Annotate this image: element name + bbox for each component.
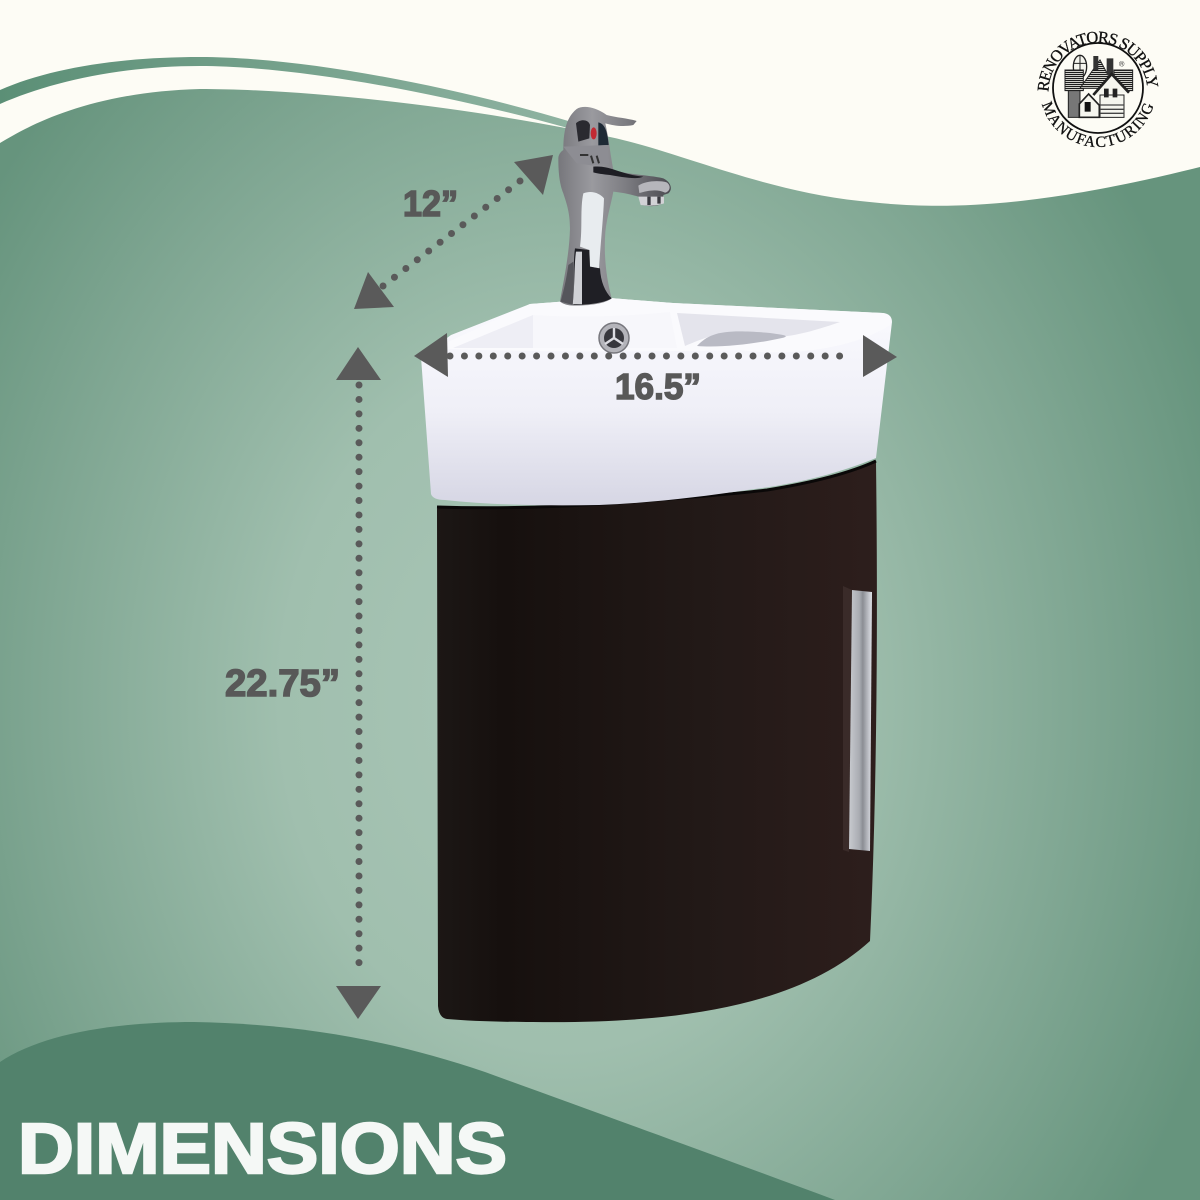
depth label: 12”: [403, 183, 458, 224]
faucet collar: [563, 145, 609, 166]
basin interior right: [677, 313, 840, 346]
width dotted line: [450, 352, 854, 360]
faucet base reflection: [573, 248, 612, 305]
cabinet top shadow line: [437, 461, 876, 508]
faucet spout head: [638, 181, 670, 193]
vanity product: [421, 107, 892, 1022]
overflow drain: [599, 323, 629, 353]
basin interior left wall: [453, 315, 533, 348]
faucet red indicator: [591, 127, 597, 139]
faucet aerator: [638, 197, 664, 206]
height dotted line: [356, 385, 362, 977]
depth dimension: 12 inch: [354, 155, 553, 309]
faucet body: [558, 107, 671, 306]
width label: 16.5”: [615, 366, 701, 407]
faucet aerator slots: [647, 197, 661, 205]
logo ring: [1053, 43, 1143, 133]
title: DIMENSIONS: [18, 1110, 507, 1189]
height label: 22.75”: [225, 663, 340, 705]
height arrowhead top: [336, 347, 381, 380]
cream top wave: [0, 0, 1200, 206]
width arrowhead left: [414, 333, 448, 377]
basin rim highlight: [448, 298, 890, 352]
cabinet: [437, 462, 877, 1022]
faucet: [558, 107, 671, 306]
faucet base light stripe: [573, 252, 582, 304]
depth arrowhead top: [514, 155, 553, 195]
depth dotted line: [383, 181, 520, 286]
basin interior center wall: [533, 312, 677, 348]
height dimension: 22.75 inch: [225, 347, 381, 1019]
height arrowhead bottom: [336, 986, 381, 1019]
faucet valve reflections: [576, 120, 590, 142]
basin interior grey shade: [697, 331, 786, 347]
faucet valve reflections right: [598, 122, 609, 146]
faucet spout reflections: [593, 166, 643, 178]
depth arrowhead bottom: [354, 272, 394, 309]
logo: Renovators Supply Manufacturing: [1037, 31, 1158, 148]
logo house drawing: ®: [1119, 60, 1125, 69]
door handle: [849, 590, 872, 851]
faucet collar slots: [580, 155, 599, 163]
basin front: [421, 298, 892, 505]
handle shadow: [843, 586, 852, 852]
faucet body highlight: [580, 192, 604, 268]
faucet base left shade: [561, 262, 574, 305]
logo arc text bottom: MANUFACTURING: [1042, 100, 1153, 148]
width arrowhead right: [863, 335, 897, 377]
logo arc text top: RENOVATORS SUPPLY: [1037, 31, 1158, 92]
width dimension: 16.5 inch: [414, 333, 897, 407]
bottom green wave: [0, 1022, 835, 1200]
green accent band in top wave: [0, 57, 575, 130]
